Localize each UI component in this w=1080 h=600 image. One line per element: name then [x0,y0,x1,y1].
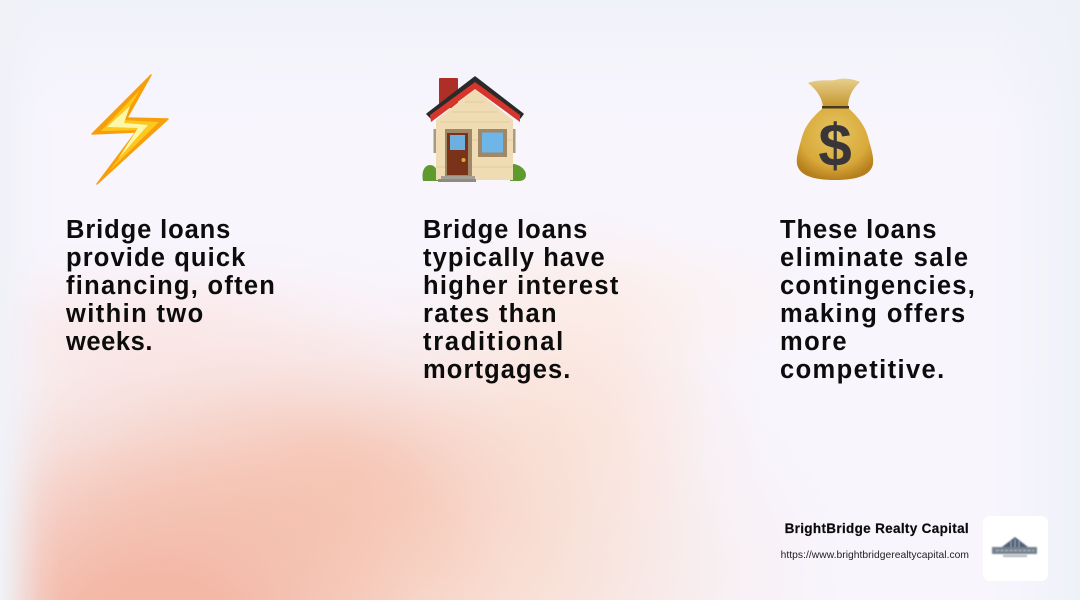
text: interest rates: mortgages. [423,356,571,384]
text: interest rates: Bridge loans [423,216,588,244]
text: sale contingencies: more [780,328,848,356]
text: sale contingencies [780,216,976,384]
text: interest rates: typically have [423,244,606,272]
door [445,129,472,176]
logo card [983,516,1048,581]
text: quick financing: financing, often [66,272,276,300]
text: sale contingencies: contingencies, [780,272,976,300]
window [478,129,507,157]
logo mark [991,536,1038,558]
bag body [797,108,873,180]
text: sale contingencies: eliminate sale [780,244,970,272]
text: quick financing: Bridge loans [66,216,231,244]
dollar sign: $ [818,112,852,179]
icon: house [422,76,526,182]
text: sale contingencies: These loans [780,216,937,244]
text: interest rates: rates than [423,300,558,328]
text: sale contingencies: competitive. [780,356,946,384]
roof [427,77,523,118]
text: interest rates [423,216,620,384]
bag neck [808,79,860,107]
icon: lightning bolt [91,74,169,185]
brand url: https://www.brightbridgerealtycapital.com [781,550,969,561]
icon: money bag [796,78,874,180]
text: sale contingencies: making offers [780,300,967,328]
walls [436,89,513,180]
text: interest rates: higher interest [423,272,620,300]
text: quick financing: within two [66,300,205,328]
text: quick financing [66,216,276,356]
text: quick financing: weeks. [66,328,153,356]
steps [441,176,475,179]
side shutters [434,129,516,153]
text: quick financing: provide quick [66,244,246,272]
text: interest rates: traditional [423,328,565,356]
chimney [439,78,458,108]
bushes [422,164,526,181]
brand name: BrightBridge Realty Capital [785,521,969,536]
